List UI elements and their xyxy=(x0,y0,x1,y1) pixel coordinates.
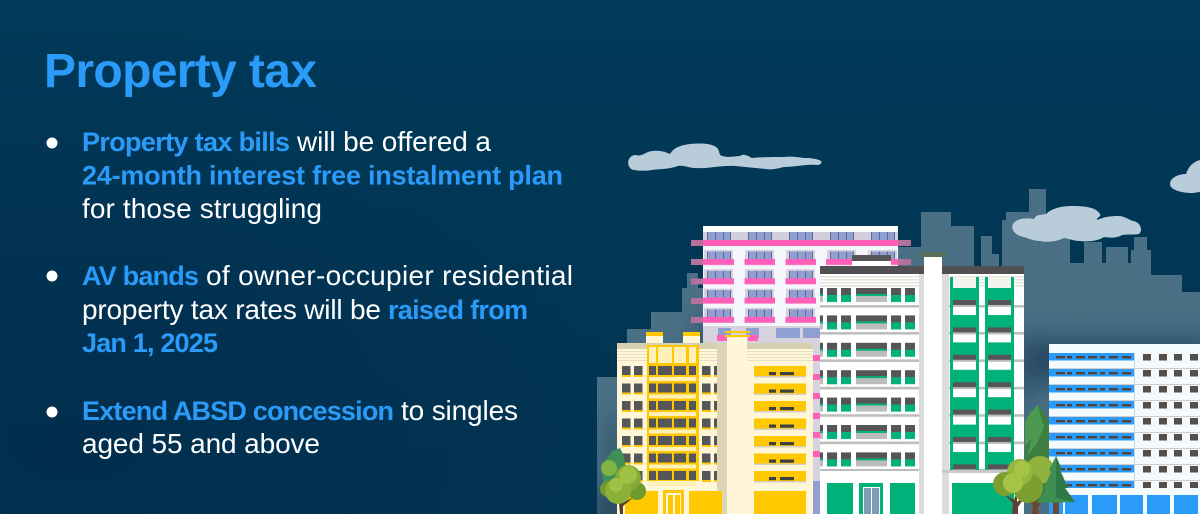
tree: small pine xyxy=(1037,456,1075,514)
bullet 2: AV bands xyxy=(46,260,573,358)
tree: right round trees xyxy=(993,456,1054,514)
bullet 2: AV bands: property tax rates will be xyxy=(82,294,381,325)
cloud middle xyxy=(1012,206,1141,242)
bullet 3: ABSD concession xyxy=(46,395,518,459)
bullet 3: ABSD concession: to singles xyxy=(401,395,518,426)
bullet list xyxy=(46,126,573,459)
bullet 1: instalment plan: for those struggling xyxy=(82,193,322,224)
skyline silhouette xyxy=(590,189,1200,514)
tree: left round tree xyxy=(600,448,646,514)
bullet 3: ABSD concession: Extend ABSD concession xyxy=(82,396,394,426)
building: pink apartment block xyxy=(691,226,911,514)
bullet 1: instalment plan xyxy=(46,126,563,224)
cloud right xyxy=(1170,160,1200,193)
bullet 1: instalment plan: Property tax bills xyxy=(82,127,290,157)
bullet 2: AV bands: Jan 1, 2025 xyxy=(82,328,218,358)
bullet 2: AV bands: raised from xyxy=(388,295,528,325)
bullet 1: instalment plan: will be offered a xyxy=(296,126,491,157)
bullet 1: instalment plan: 24-month interest free instalment plan xyxy=(82,160,563,190)
building: green and white block xyxy=(820,252,1024,514)
building: yellow and cream block xyxy=(617,331,813,514)
tree: tall pine xyxy=(1025,405,1049,500)
title: Property tax xyxy=(44,45,317,98)
bullet 3: ABSD concession: aged 55 and above xyxy=(82,428,320,459)
building: blue and white block xyxy=(1049,344,1200,514)
bullet 2: AV bands: of owner-occupier residential xyxy=(206,260,573,291)
bullet 2: AV bands: AV bands xyxy=(82,261,199,291)
cloud left xyxy=(628,144,821,171)
